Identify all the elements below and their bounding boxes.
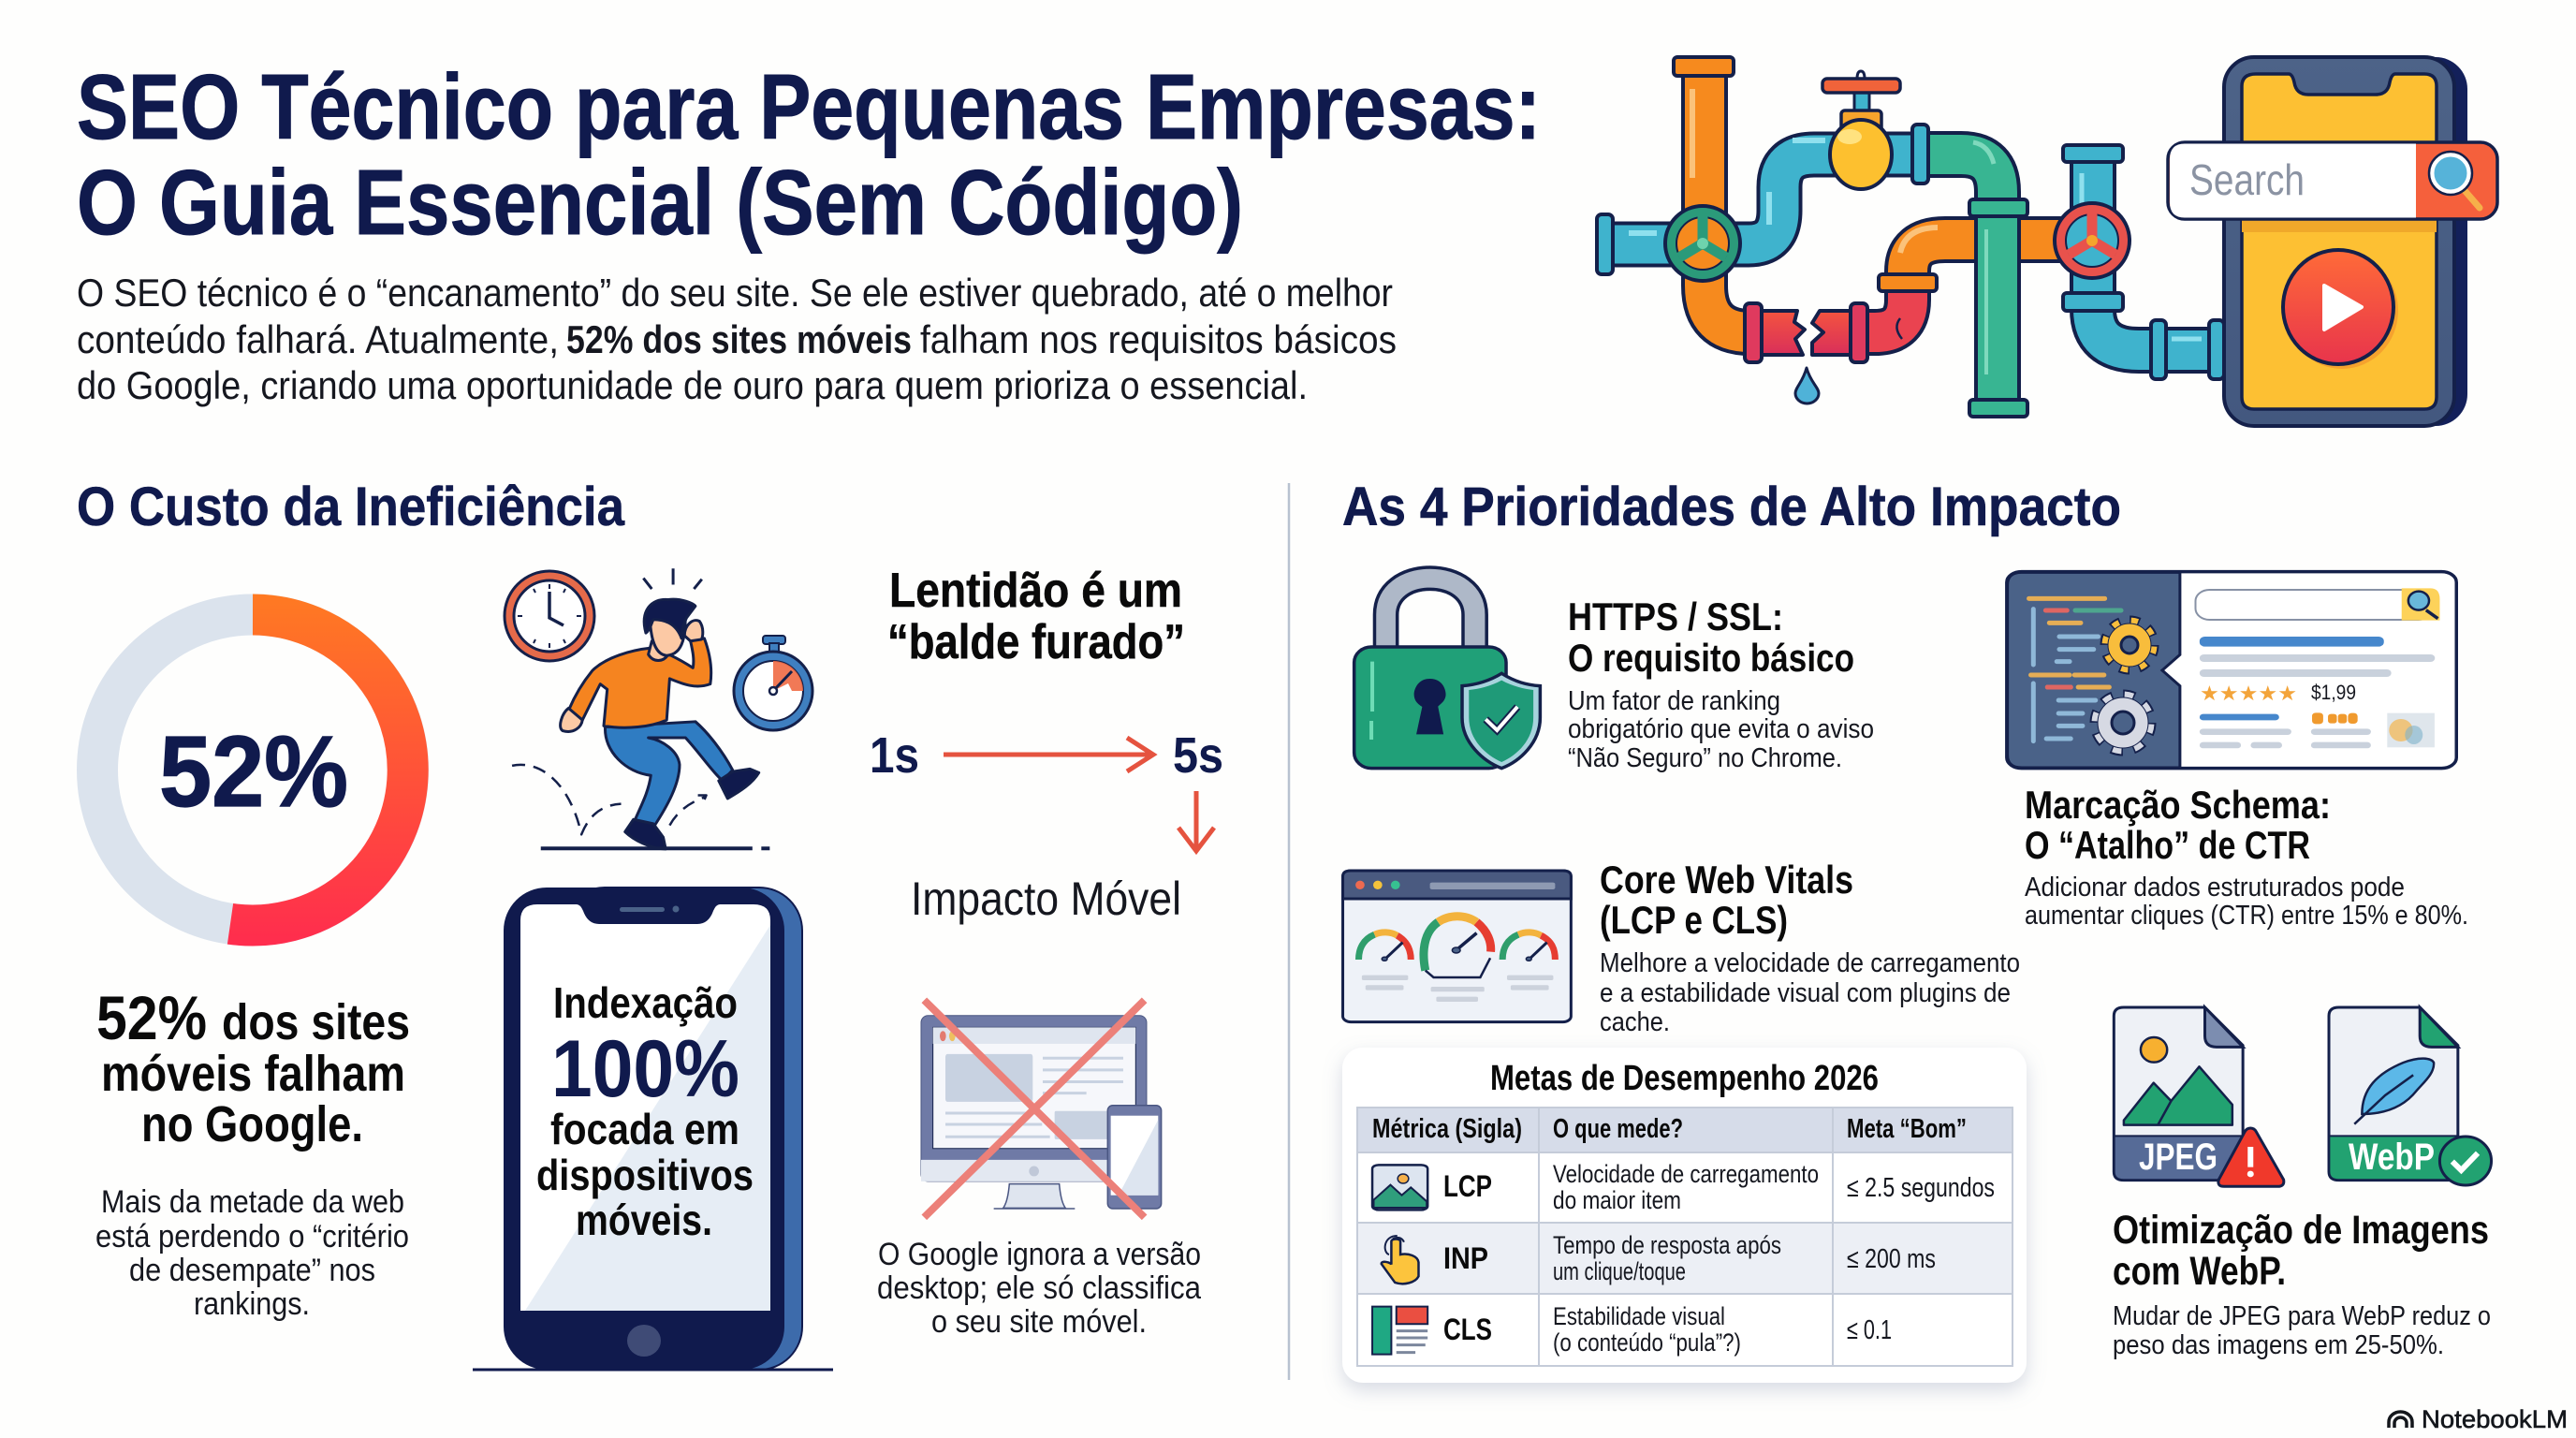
icon: smartphone with play button xyxy=(2209,57,2467,426)
watermark: notebooklm: NotebookLM xyxy=(2422,1405,2568,1433)
legs xyxy=(606,722,733,828)
text: webp xyxy=(2113,1208,2491,1360)
hand left xyxy=(561,708,582,731)
heading: right section: As 4 Prioridades de Alto Impacto xyxy=(1342,477,2121,537)
text: https: “Não Seguro” no Chrome. xyxy=(1568,743,1842,773)
intro text xyxy=(77,271,1397,407)
text: https: obrigatório que evita o aviso xyxy=(1568,714,1874,744)
callout: 52% dos sites: móveis falham xyxy=(101,1046,405,1102)
timeline 1s to 5s: 1s xyxy=(870,727,919,784)
text: google ignora xyxy=(877,1237,1201,1340)
right gauge xyxy=(1502,932,1555,961)
divider xyxy=(1288,483,1290,1380)
intro text: falham nos requisitos básicos xyxy=(920,317,1397,361)
phone text: móveis. xyxy=(576,1196,712,1244)
torso and arms xyxy=(569,638,711,727)
icon: padlock with shield xyxy=(1354,567,1540,769)
metric names xyxy=(1443,1169,1492,1346)
icon: schema card xyxy=(2007,572,2456,769)
icon: broken red pipe with crack xyxy=(1745,281,1908,362)
icon: water drop xyxy=(1795,368,1819,404)
donut chart 52%: 52% xyxy=(159,714,348,828)
left gauge xyxy=(1359,932,1411,961)
text: core web vitals: Core Web Vitals xyxy=(1600,858,1853,902)
table header: Meta “Bom” xyxy=(1847,1114,1967,1144)
table header xyxy=(1372,1114,1967,1144)
text: mais da metade: está perdendo o “critério xyxy=(95,1219,409,1255)
icon: gears and stars: $1,99 xyxy=(2311,681,2356,704)
text: webp: Otimização de Imagens xyxy=(2113,1208,2489,1253)
center gauge xyxy=(1424,917,1491,977)
text: webp: com WebP. xyxy=(2113,1249,2286,1294)
text: google ignora: o seu site móvel. xyxy=(931,1304,1147,1340)
table header: Métrica (Sigla) xyxy=(1372,1114,1522,1144)
metric descriptions: Estabilidade visual xyxy=(1553,1302,1725,1330)
title xyxy=(77,55,1541,254)
heading: balde furado: Lentidão é um xyxy=(889,564,1182,618)
metric targets: ≤ 2.5 segundos xyxy=(1847,1173,1995,1203)
icon: blue S pipe xyxy=(1597,140,1921,274)
phone text: dispositivos xyxy=(536,1151,754,1199)
icon: stumbling person xyxy=(512,568,769,849)
text: mais da metade: rankings. xyxy=(194,1286,310,1322)
icon: gears and stars xyxy=(2096,622,2356,750)
feet xyxy=(625,769,759,849)
heading: left section: O Custo da Ineficiência xyxy=(77,477,625,537)
metric descriptions: um clique/toque xyxy=(1553,1257,1686,1285)
metric descriptions: Tempo de resposta após xyxy=(1553,1231,1781,1259)
timeline 1s to 5s xyxy=(870,727,1223,784)
metric descriptions xyxy=(1553,1160,1819,1357)
text: google ignora: O Google ignora a versão xyxy=(878,1237,1201,1272)
alert marks xyxy=(643,568,702,589)
text: https xyxy=(1568,594,1874,773)
icon: orange vertical pipe xyxy=(1674,57,1750,332)
text: core web vitals: (LCP e CLS) xyxy=(1600,898,1788,942)
search bar xyxy=(2168,142,2497,219)
text: core web vitals xyxy=(1600,858,2020,1037)
icon: stopwatch xyxy=(734,636,812,730)
text: https: Um fator de ranking xyxy=(1568,686,1780,716)
phone text: Indexação xyxy=(553,978,738,1027)
icon: webp file xyxy=(2329,1007,2492,1185)
text: https: HTTPS / SSL: xyxy=(1568,594,1783,638)
metric names: INP xyxy=(1443,1241,1488,1275)
text: core web vitals: Melhore a velocidade de carregamento xyxy=(1600,948,2020,978)
icon: yellow tap valve xyxy=(1822,71,1900,189)
table header: O que mede? xyxy=(1553,1114,1683,1144)
intro text: do Google, criando uma oportunidade de ouro para quem prioriza o essencial. xyxy=(77,363,1308,407)
phone: indexação 100% xyxy=(473,888,833,1370)
icon: orange upper pipe xyxy=(1879,227,2092,291)
metric targets: ≤ 0.1 xyxy=(1847,1315,1892,1345)
phone text: focada em xyxy=(550,1105,739,1153)
icon: blue right pipe xyxy=(2063,145,2224,379)
text: https: O requisito básico xyxy=(1568,636,1854,680)
title: SEO Técnico para Pequenas Empresas: xyxy=(77,55,1541,158)
heading: balde furado xyxy=(887,564,1185,669)
text: schema xyxy=(2025,783,2468,931)
heading: balde furado: “balde furado” xyxy=(887,615,1185,669)
illustration: pipes and phone xyxy=(1597,57,2497,426)
table rows xyxy=(1357,1108,2012,1366)
text: core web vitals: e a estabilidade visual com plugins de xyxy=(1600,978,2011,1008)
callout: 52% dos sites: 52% xyxy=(96,983,207,1052)
text: core web vitals: cache. xyxy=(1600,1007,1670,1037)
table title: Metas de Desempenho 2026 xyxy=(1490,1059,1879,1098)
text: mais da metade: de desempate” nos xyxy=(129,1253,375,1288)
icon: red wheel valve xyxy=(2055,203,2130,278)
callout: 52% dos sites xyxy=(96,983,410,1152)
metric descriptions: Velocidade de carregamento xyxy=(1553,1160,1819,1188)
intro text: conteúdo falhará. Atualmente, xyxy=(77,317,559,361)
metric descriptions: do maior item xyxy=(1553,1186,1681,1214)
donut chart 52% xyxy=(97,614,408,925)
text: schema: O “Atalho” de CTR xyxy=(2025,823,2310,867)
text: impacto móvel: Impacto Móvel xyxy=(911,873,1181,925)
text: mais da metade xyxy=(95,1184,409,1322)
text: webp: peso das imagens em 25-50%. xyxy=(2113,1330,2444,1360)
intro text: 52% dos sites móveis xyxy=(566,317,912,361)
callout: 52% dos sites: no Google. xyxy=(141,1096,363,1152)
callout: 52% dos sites: dos sites xyxy=(222,994,410,1050)
text: google ignora: desktop; ele só classifica xyxy=(877,1270,1201,1306)
motion dashes xyxy=(512,765,707,834)
icon: browser with gauges xyxy=(1343,871,1571,1022)
table card: metas de desempenho xyxy=(1342,1048,2027,1383)
arrow right xyxy=(944,738,1153,771)
metric names: LCP xyxy=(1443,1169,1492,1203)
text: mais da metade: Mais da metade da web xyxy=(101,1184,404,1220)
metric names: CLS xyxy=(1443,1313,1492,1346)
icon: green wheel valve xyxy=(1665,206,1740,281)
text: schema: Marcação Schema: xyxy=(2025,783,2331,827)
text: webp: Mudar de JPEG para WebP reduz o xyxy=(2113,1301,2491,1331)
metric descriptions: (o conteúdo “pula”?) xyxy=(1553,1328,1741,1357)
metric targets xyxy=(1847,1173,1995,1345)
ground line xyxy=(541,846,769,850)
metric targets: ≤ 200 ms xyxy=(1847,1244,1936,1274)
icon: webp file: WebP xyxy=(2349,1137,2435,1178)
search bar: Search xyxy=(2189,155,2305,204)
icon: jpeg file: JPEG xyxy=(2139,1137,2217,1178)
text: schema: aumentar cliques (CTR) entre 15% e 80%. xyxy=(2025,901,2468,931)
text: schema: Adicionar dados estruturados pode xyxy=(2025,873,2405,902)
timeline 1s to 5s: 5s xyxy=(1173,727,1223,784)
icon: green pipe xyxy=(1912,125,2027,417)
intro text: O SEO técnico é o “encanamento” do seu site. Se ele estiver quebrado, até o melhor xyxy=(77,271,1393,315)
hair xyxy=(644,599,695,638)
arrow down xyxy=(1178,791,1214,851)
phone text: 100% xyxy=(551,1024,739,1114)
icon: jpeg file xyxy=(2114,1007,2284,1186)
neck and face xyxy=(649,641,669,661)
phone screen xyxy=(520,904,770,1311)
phone text xyxy=(536,978,754,1244)
icon: crossed desktop xyxy=(921,1000,1162,1217)
icon: wall clock xyxy=(505,571,594,661)
table icons xyxy=(1372,1165,1427,1355)
hand on head xyxy=(684,621,703,641)
icon: gears and stars: ★★★★★ xyxy=(2200,682,2297,706)
title: O Guia Essencial (Sem Código) xyxy=(77,151,1243,254)
